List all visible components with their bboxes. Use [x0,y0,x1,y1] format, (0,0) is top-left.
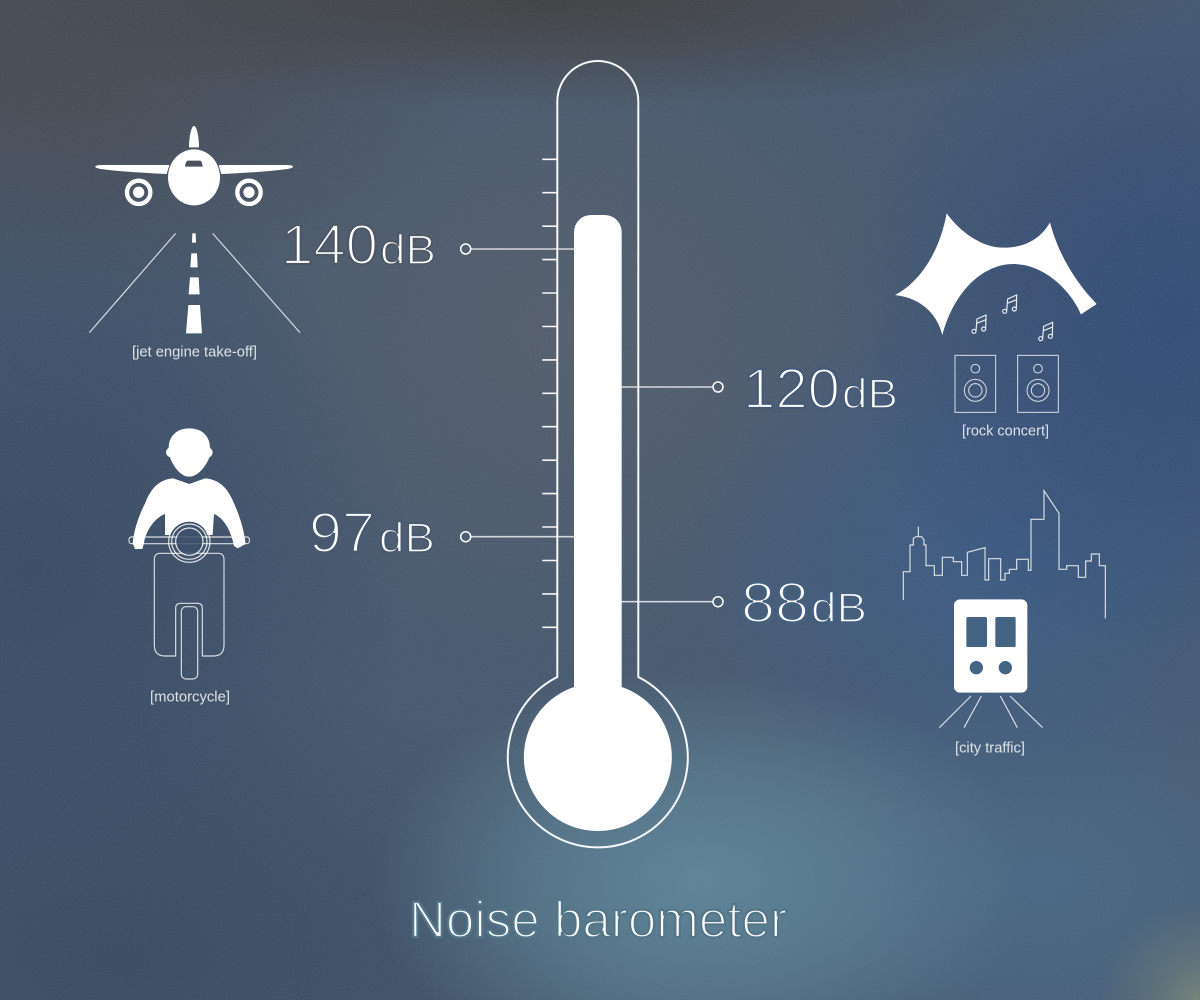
scooter body outline [129,537,249,679]
value: 97 dB: 97 [309,501,375,565]
stage canopy [895,213,1097,335]
value: 120 dB: 120 [743,357,840,421]
value: 120 dB [743,357,898,421]
value: 88 dB: dB [811,584,867,631]
label: jet engine take-off: [jet engine take-off] [132,344,257,360]
label: city traffic: [city traffic] [955,740,1025,756]
icon: city traffic [903,491,1105,728]
label: motorcycle: [motorcycle] [150,690,230,706]
value: 88 dB [741,571,867,635]
skyline [903,491,1105,618]
scale ticks [542,159,557,627]
rails [939,696,1043,728]
value: 140 dB: 140 [281,213,378,277]
icon: motorcycle rider [129,428,249,679]
marker: 97 dB leader line [461,532,574,542]
airplane [95,126,293,205]
speakers [955,355,1058,412]
label: rock concert: [rock concert] [962,424,1049,440]
headlight [169,521,210,562]
icon: rock concert [895,213,1097,412]
thermometer [508,61,688,847]
icon: jet on runway [89,126,300,333]
runway [89,233,300,333]
title: Noise barometer [409,891,787,948]
value: 120 dB: dB [842,370,898,417]
rider [133,428,246,549]
thermometer outline [508,61,688,847]
marker: 140 dB leader line [461,244,574,254]
thermometer mercury fill [524,215,672,831]
value: 97 dB [309,501,435,565]
value: 140 dB: dB [380,226,436,273]
value: 140 dB [281,213,436,277]
music notes [972,295,1053,341]
value: 88 dB: 88 [741,571,809,635]
marker: 88 dB leader line [621,597,723,607]
train front [954,599,1027,693]
value: 97 dB: dB [379,514,435,561]
marker: 120 dB leader line [621,382,723,392]
